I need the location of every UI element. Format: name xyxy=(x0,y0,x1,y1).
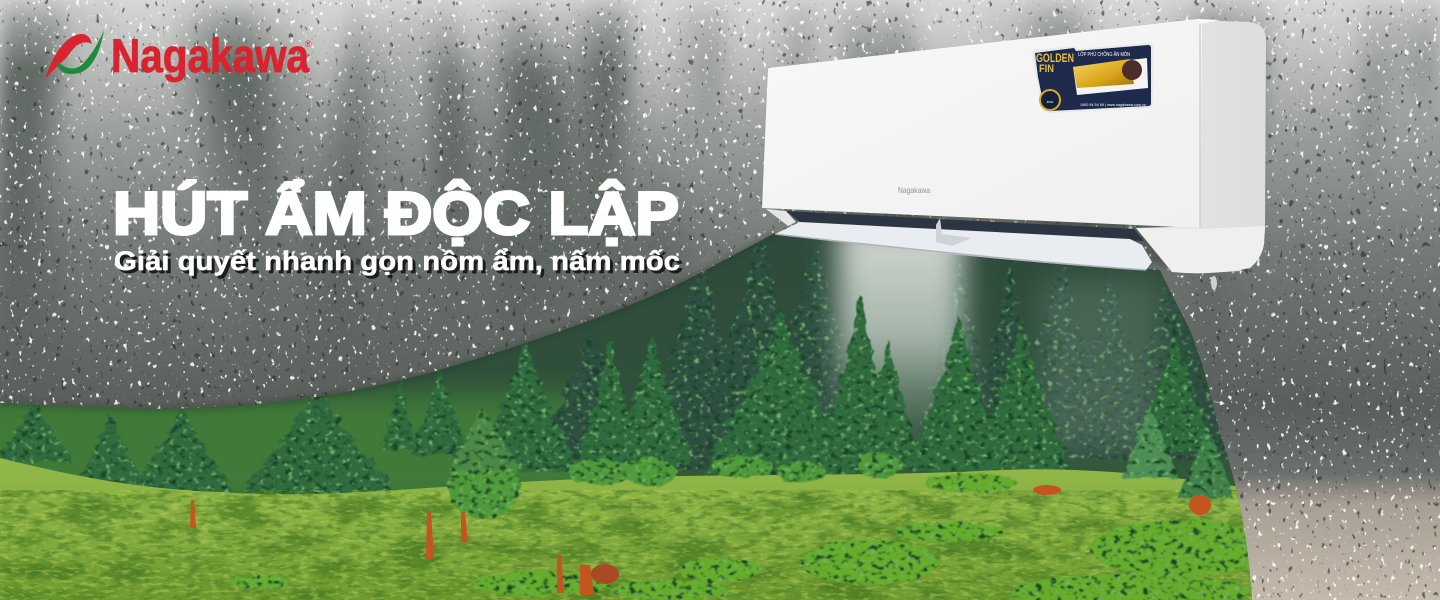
front conifers xyxy=(0,295,1215,497)
eco badge: eco xyxy=(1047,99,1054,104)
orange wild plants xyxy=(190,485,1211,595)
title: HÚT ẨM ĐỘC LẬP xyxy=(113,180,679,247)
lower right bracket xyxy=(1136,226,1265,273)
meadow grass xyxy=(0,458,1260,600)
dark vent opening xyxy=(786,211,1144,241)
sticker heading second line: FIN xyxy=(1039,63,1054,75)
left forest backdrop xyxy=(0,395,590,505)
left bracket xyxy=(766,209,796,226)
side seam xyxy=(1199,24,1201,228)
sticker: Golden Fin xyxy=(1032,43,1154,113)
logo wordmark: Nagakawa xyxy=(111,29,310,82)
logo icon: red and green swoosh xyxy=(45,30,104,79)
front panel xyxy=(762,20,1202,228)
sticker border and panel xyxy=(1032,43,1154,113)
subtitle text: Giải quyết nhanh gọn nồm ẩm, nấm mốc xyxy=(114,246,680,276)
gold fin image xyxy=(1073,58,1148,95)
small bright shrubs xyxy=(448,404,1235,518)
background conifers xyxy=(529,230,1238,470)
sticker heading: GOLDEN xyxy=(1036,51,1074,65)
open louvre flap xyxy=(775,222,1152,270)
unit shadow xyxy=(770,24,1262,270)
vivid moss mounds xyxy=(230,473,1270,600)
brand on unit: Nagakawa xyxy=(898,185,930,195)
air conditioner unit xyxy=(762,19,1266,273)
subtitle shadow: Giải quyết nhanh gọn nồm ẩm, nấm mốc xyxy=(117,249,683,279)
water drip under unit xyxy=(1211,276,1217,290)
subtitle xyxy=(114,246,683,279)
haze over far right trees xyxy=(1040,280,1160,450)
centre hinge xyxy=(936,218,972,246)
website line: 1900 54 54 89 | www.nagakawa.com.vn xyxy=(1080,103,1146,107)
registered mark: ® xyxy=(305,39,312,49)
louvre lower edge xyxy=(775,234,1146,270)
top face sliver xyxy=(768,19,1220,68)
sticker subheading: LỚP PHỦ CHỐNG ĂN MÒN xyxy=(1078,51,1130,58)
curtain shadow edge xyxy=(0,233,775,409)
logo: Nagakawa xyxy=(45,29,312,82)
side casing xyxy=(1136,20,1266,272)
misty clearing xyxy=(838,225,963,455)
forest scene revealed behind the glass xyxy=(0,233,1252,600)
